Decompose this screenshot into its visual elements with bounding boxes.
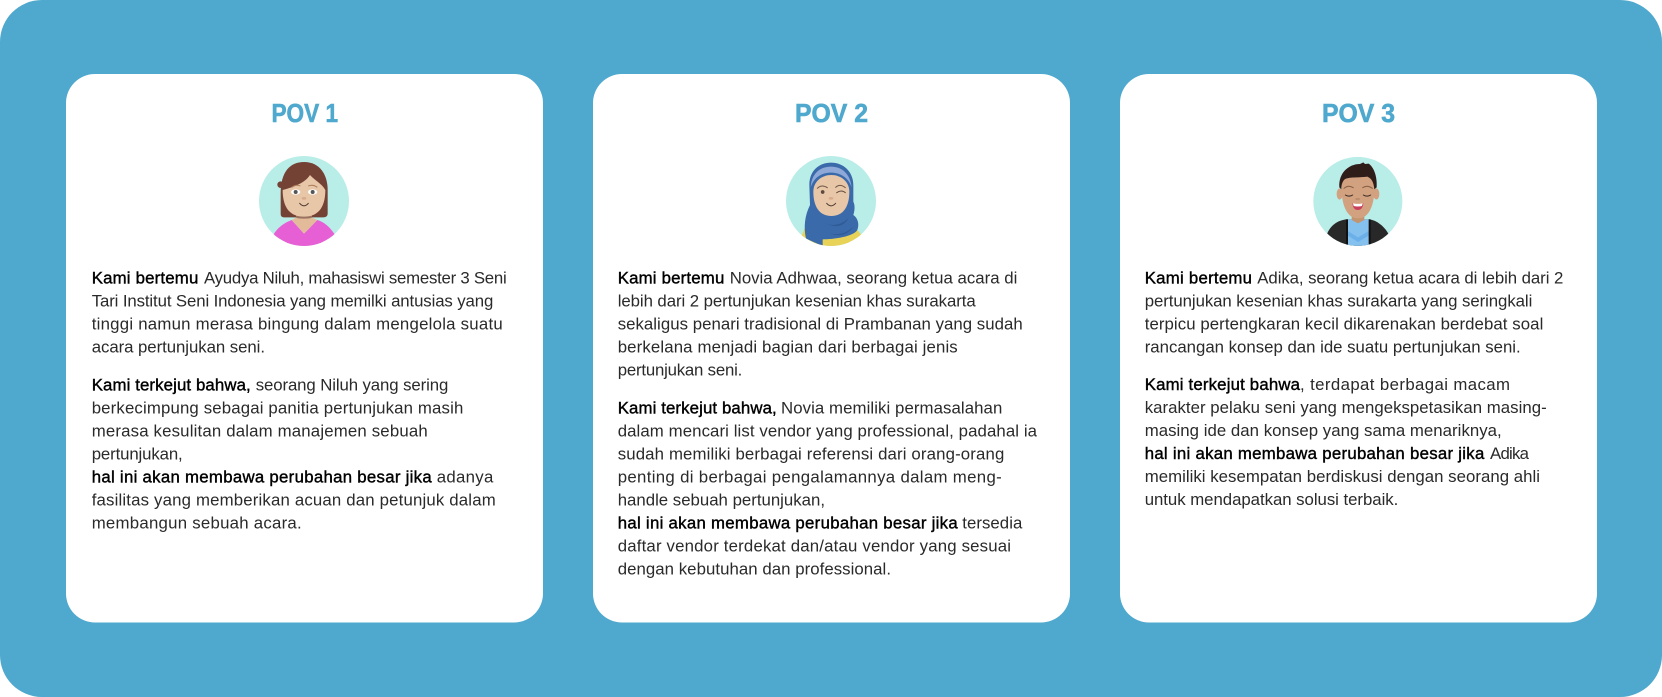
text: Kami bertemu paragraph 2: berkelana menjadi bagian dari berbagai jenis: [618, 337, 958, 356]
text: Kami bertemu paragraph 3: terpicu pertengkaran kecil dikarenakan berdebat soal: [1145, 314, 1543, 333]
text: Kami terkejut paragraph 1: pertunjukan,: [92, 445, 183, 464]
icon: avatar woman with blue hijab: [786, 156, 876, 250]
text: Kami terkejut paragraph 1: berkecimpung sebagai panitia pertunjukan masih: [92, 399, 463, 418]
icon: avatar woman with brown hair: [259, 156, 349, 250]
text: Kami bertemu paragraph 2: sekaligus penari tradisional di Prambanan yang sudah: [618, 314, 1023, 333]
text: Kami terkejut paragraph 2: sudah memiliki berbagai referensi dari orang-orang: [618, 444, 1004, 464]
text: Kami terkejut paragraph 1: hal ini akan membawa perubahan besar jika: [92, 468, 432, 487]
text: Kami bertemu paragraph 1: acara pertunjukan seni.: [92, 337, 265, 356]
heading: POV 3: POV 3: [1322, 98, 1395, 128]
text: Kami terkejut paragraph 1: membangun sebuah acara.: [92, 514, 302, 533]
text: Kami terkejut paragraph 3: [1145, 375, 1547, 509]
text: Kami bertemu paragraph 1: Ayudya Niluh, mahasiswi semester 3 Seni: [204, 268, 507, 287]
text: Kami bertemu paragraph 2: pertunjukan seni.: [618, 360, 742, 379]
text: Kami terkejut paragraph 1: [92, 376, 496, 533]
card background 3: [1120, 74, 1597, 622]
text: Kami bertemu paragraph 1: Tari Institut Seni Indonesia yang memilki antusias yang: [92, 291, 493, 310]
text: Kami terkejut paragraph 3: hal ini akan membawa perubahan besar jika: [1145, 444, 1485, 463]
text: Kami terkejut paragraph 2: hal ini akan membawa perubahan besar jika: [618, 514, 958, 532]
panel: POV 3: [1120, 74, 1597, 622]
text: Kami bertemu paragraph 2: Kami bertemu: [618, 268, 724, 287]
heading: POV 1: POV 1: [272, 98, 338, 128]
text: Kami terkejut paragraph 1: seorang Niluh yang sering: [256, 376, 448, 395]
text: Kami terkejut paragraph 1: adanya: [437, 468, 494, 487]
text: Kami terkejut paragraph 1: merasa kesulitan dalam manajemen sebuah: [92, 422, 428, 441]
panel: POV 1: [66, 74, 543, 622]
text: Kami terkejut paragraph 3: Kami terkejut bahwa: [1145, 375, 1301, 394]
text: Kami terkejut paragraph 2: tersedia: [962, 514, 1023, 532]
text: Kami terkejut paragraph 3: karakter pelaku seni yang mengekspetasikan masing-: [1145, 398, 1547, 417]
text: Kami terkejut paragraph 3: Adika: [1490, 444, 1530, 463]
text: Kami terkejut paragraph 1: Kami terkejut bahwa,: [92, 376, 251, 395]
text: Kami terkejut paragraph 2: handle sebuah pertunjukan,: [618, 490, 825, 510]
text: Kami bertemu paragraph 1: Kami bertemu: [92, 268, 198, 287]
text: Kami terkejut paragraph 2: dengan kebutuhan dan professional.: [618, 560, 891, 578]
text: Kami bertemu paragraph 1: [92, 268, 507, 356]
text: Kami bertemu paragraph 3: Kami bertemu: [1145, 268, 1252, 287]
text: Kami terkejut paragraph 3: masing ide dan konsep yang sama menariknya,: [1145, 421, 1502, 440]
card background 2: [593, 74, 1070, 622]
text: Kami terkejut paragraph 2: dalam mencari list vendor yang professional, padahal ia: [618, 422, 1038, 440]
text: Kami bertemu paragraph 2: Novia Adhwaa, seorang ketua acara di: [730, 268, 1017, 287]
heading: POV 2: POV 2: [795, 98, 868, 128]
text: Kami bertemu paragraph 1: tinggi namun merasa bingung dalam mengelola suatu: [92, 314, 503, 333]
text: Kami bertemu paragraph 2: [618, 268, 1023, 379]
text: Kami terkejut paragraph 2: Kami terkejut bahwa,: [618, 398, 777, 418]
text: Kami bertemu paragraph 3: rancangan konsep dan ide suatu pertunjukan seni.: [1145, 337, 1521, 356]
panel: POV 2: [593, 74, 1070, 622]
text: Kami bertemu paragraph 3: pertunjukan kesenian khas surakarta yang seringkali: [1145, 291, 1532, 310]
text: Kami terkejut paragraph 3: memiliki kesempatan berdiskusi dengan seorang ahli: [1145, 467, 1540, 486]
text: Kami bertemu paragraph 3: Adika, seorang ketua acara di lebih dari 2: [1257, 268, 1563, 287]
text: Kami terkejut paragraph 2: daftar vendor terdekat dan/atau vendor yang sesuai: [618, 536, 1011, 556]
card background 1: [66, 74, 543, 622]
text: Kami terkejut paragraph 3: untuk mendapatkan solusi terbaik.: [1145, 490, 1398, 509]
icon: avatar man smiling: [1313, 157, 1402, 250]
text: Kami terkejut paragraph 3: , terdapat berbagai macam: [1300, 375, 1510, 394]
text: Kami bertemu paragraph 2: lebih dari 2 pertunjukan kesenian khas surakarta: [618, 291, 976, 310]
text: Kami terkejut paragraph 2: [618, 398, 1038, 578]
text: Kami bertemu paragraph 3: [1145, 268, 1563, 356]
text: Kami terkejut paragraph 2: Novia memiliki permasalahan: [781, 398, 1002, 418]
text: Kami terkejut paragraph 1: fasilitas yang memberikan acuan dan petunjuk dalam: [92, 491, 496, 510]
text: Kami terkejut paragraph 2: penting di berbagai pengalamannya dalam meng-: [618, 468, 1002, 486]
